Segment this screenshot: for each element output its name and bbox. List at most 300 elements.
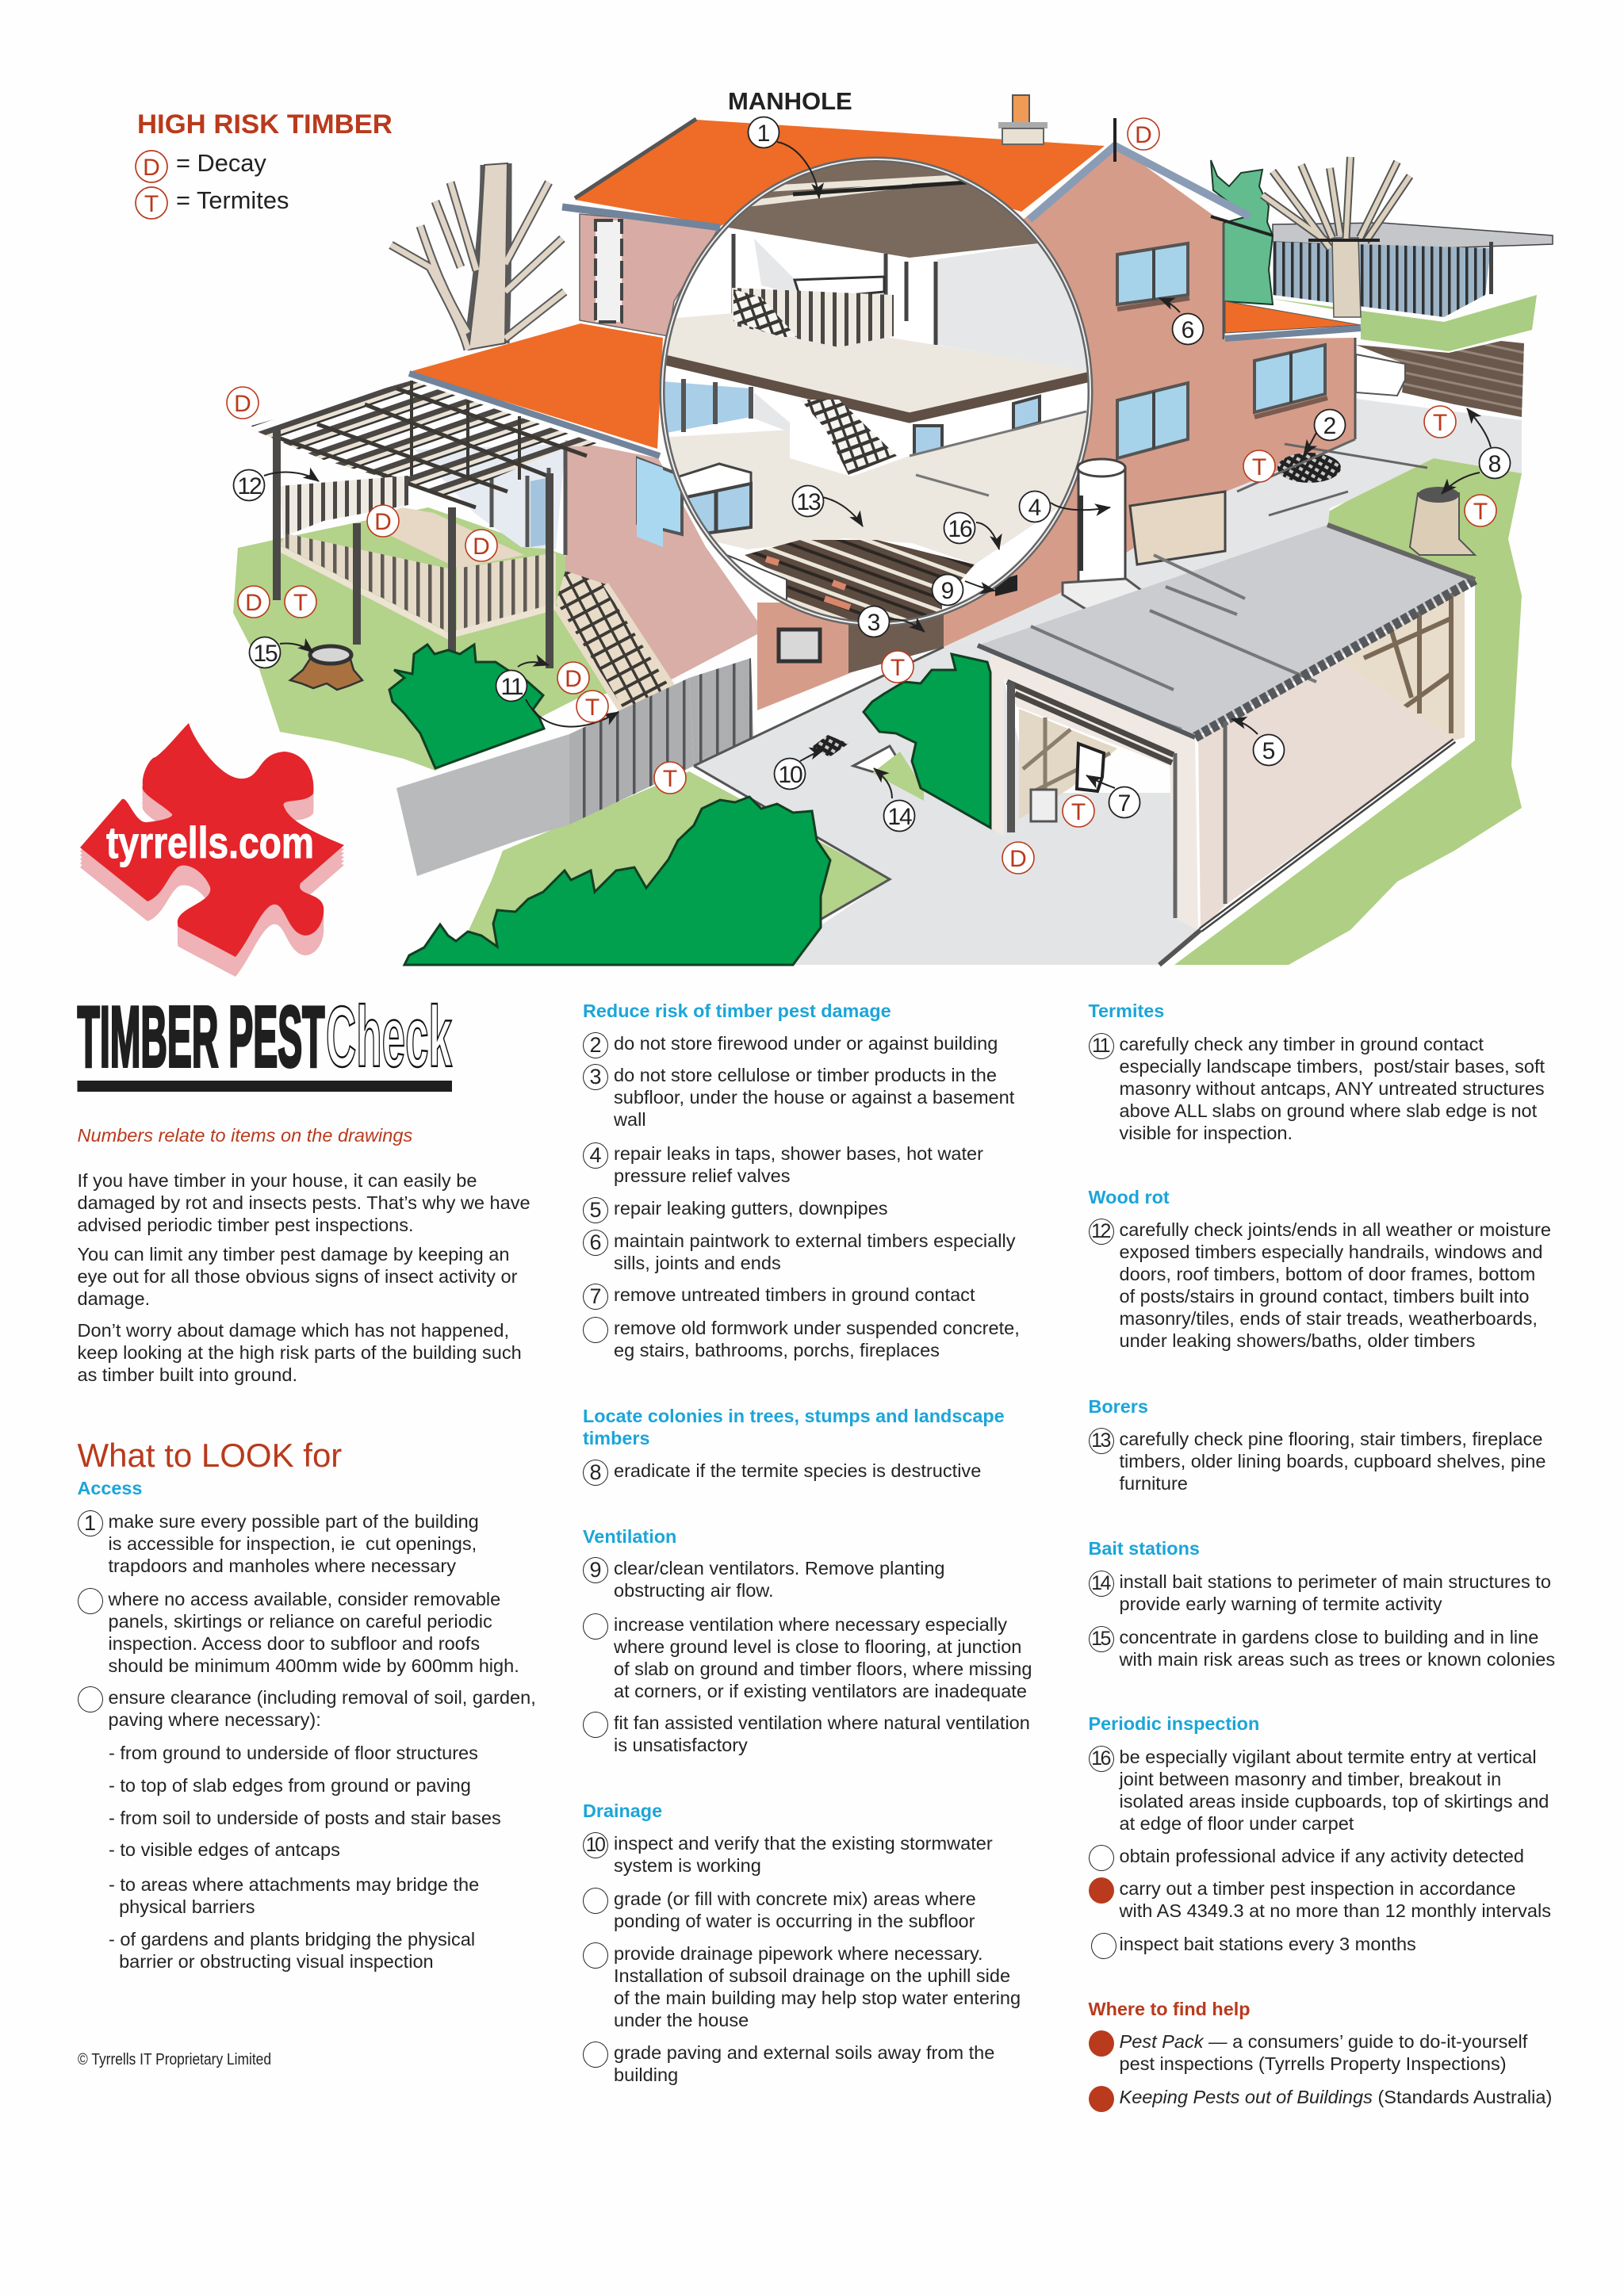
decay and termite markers: D — [565, 666, 582, 692]
intro paragraph 3 — [78, 1319, 522, 1385]
left pale wall lower — [565, 440, 757, 681]
numbered markers: 6 — [1182, 317, 1194, 343]
fence shadow — [396, 701, 691, 876]
joist shadows — [793, 181, 991, 194]
lower floor — [658, 411, 1094, 564]
front shrub — [404, 797, 830, 965]
kitchen unit glass — [687, 484, 751, 536]
right stump top — [1418, 487, 1459, 503]
neighbour roof — [1273, 223, 1553, 248]
beige cabinet — [1130, 492, 1225, 564]
section: wood rot: Wood rot — [1088, 1186, 1170, 1207]
item 11: masonry without antcaps, ANY untreated structures — [1120, 1078, 1545, 1099]
leader arrows — [264, 142, 1491, 798]
item 14 — [1089, 1571, 1551, 1614]
item 12: carefully check joints/ends in all weather or moisture — [1120, 1219, 1551, 1240]
section: termites: Termites — [1088, 1001, 1164, 1021]
section: locate colonies — [583, 1405, 1005, 1448]
item 16: joint between masonry and timber, breakout in — [1120, 1768, 1501, 1789]
legend: high risk timber — [136, 109, 393, 219]
posts — [277, 428, 550, 668]
side wall — [1198, 661, 1454, 930]
roof plane — [409, 323, 663, 449]
circle outline — [662, 159, 1090, 624]
numbered markers — [233, 117, 1510, 831]
item increase ventilation: where ground level is close to flooring, at junction — [614, 1636, 1021, 1657]
right window — [1013, 396, 1040, 430]
item obtain advice: obtain professional advice if any activity detected — [1120, 1846, 1524, 1866]
item 11: visible for inspection. — [1120, 1123, 1293, 1143]
subfloor opening — [848, 603, 944, 673]
gable bracket line — [1211, 216, 1273, 235]
item 10 — [583, 1832, 993, 1876]
item 14: provide early warning of termite activity — [1120, 1594, 1442, 1614]
stair stringers — [556, 584, 675, 711]
item no access: where no access available, consider removable — [108, 1589, 500, 1609]
item carry out inspection: with AS 4349.3 at no more than 12 monthly intervals — [1120, 1900, 1551, 1920]
item 12: of posts/stairs in ground contact, timbers built into — [1120, 1286, 1529, 1307]
item 11 — [1089, 1033, 1545, 1143]
wall vent — [995, 575, 1017, 596]
drain grate — [812, 735, 848, 757]
lawn wedge by box — [872, 752, 924, 801]
left blue window — [638, 458, 682, 534]
far beige open wall — [1340, 582, 1465, 740]
bearer — [280, 549, 556, 636]
item 1 — [78, 1510, 479, 1576]
decay and termite markers: T — [1433, 410, 1447, 436]
note: Numbers relate to items on the drawings — [78, 1124, 412, 1145]
item 1: is accessible for inspection, ie cut openings, — [108, 1533, 477, 1554]
item no access: panels, skirtings or reliance on careful periodic — [108, 1611, 492, 1632]
decay and termite markers: T — [293, 590, 308, 616]
decay and termite markers: D — [374, 509, 392, 535]
sub item: - from ground to underside of floor structures — [109, 1743, 478, 1763]
item 9 — [583, 1557, 945, 1601]
item 3: wall — [614, 1108, 646, 1129]
item pest pack — [1088, 2030, 1527, 2074]
small roof gutter — [1225, 328, 1361, 339]
numbered markers: 16 — [948, 516, 972, 542]
upper lawn — [1268, 295, 1537, 351]
neighbour post — [1489, 242, 1493, 294]
item 7: 7 — [589, 1284, 602, 1308]
item 16: be especially vigilant about termite entry at vertical — [1120, 1746, 1537, 1766]
circle background — [942, 243, 1088, 610]
floor crack line — [916, 475, 989, 496]
logo text: tyrrells.com — [106, 817, 314, 867]
main right wall — [944, 144, 1355, 647]
base rail highlight — [1201, 740, 1454, 930]
left pale wall upper — [580, 214, 720, 336]
magnified cutaway circle — [658, 151, 1094, 634]
gutter — [409, 373, 660, 456]
deck floor — [365, 507, 524, 568]
upper floor — [658, 313, 1094, 415]
item 10: 10 — [586, 1833, 603, 1855]
item carry out inspection — [1088, 1877, 1551, 1922]
base rail — [1201, 740, 1454, 930]
item clearance: ensure clearance (including removal of soil, garden, — [108, 1687, 536, 1708]
item 13: 13 — [1091, 1429, 1109, 1451]
item keeping pests: Keeping Pests out of Buildings (Standards Australia) — [1120, 2087, 1552, 2107]
roof — [978, 525, 1475, 737]
front edge — [978, 645, 1195, 737]
left stump — [290, 654, 362, 690]
item 6 — [583, 1230, 1015, 1273]
section: reduce risk: Reduce risk of timber pest damage — [583, 1001, 891, 1021]
upper stair flight — [733, 289, 797, 337]
neighbouring house — [1268, 223, 1553, 417]
window upper — [1117, 243, 1189, 309]
item bait inspection: inspect bait stations every 3 months — [1120, 1933, 1416, 1954]
legend termites — [136, 186, 289, 219]
item formwork: eg stairs, bathrooms, porchs, fireplaces — [614, 1340, 940, 1360]
item 7: remove untreated timbers in ground contact — [614, 1284, 975, 1305]
right fascia — [1195, 580, 1475, 737]
intro paragraph 2: You can limit any timber pest damage by keeping an — [78, 1243, 509, 1264]
item clearance: paving where necessary): — [108, 1709, 321, 1730]
lower brick pier — [757, 603, 850, 710]
circle inner highlight — [662, 159, 1090, 624]
glazing frames — [492, 444, 565, 555]
item fan — [583, 1712, 1030, 1755]
right path — [1226, 399, 1522, 508]
window lower — [1117, 383, 1188, 458]
upper grey wall — [937, 243, 1094, 373]
intro paragraph 1: advised periodic timber pest inspections. — [78, 1215, 414, 1235]
fence — [569, 658, 753, 825]
right lawn — [1174, 458, 1522, 965]
centre window — [914, 426, 942, 456]
section: access: Access — [78, 1478, 142, 1498]
legend decay: D — [143, 155, 160, 181]
decay and termite markers: T — [663, 766, 677, 792]
stairs — [556, 571, 675, 711]
intro paragraph 1 — [78, 1170, 530, 1235]
item 13 — [1089, 1428, 1545, 1494]
item 13: carefully check pine flooring, stair timbers, fireplace — [1120, 1429, 1542, 1449]
house walls — [565, 144, 1355, 710]
numbered markers: 1 — [757, 121, 770, 147]
numbered markers: 15 — [253, 641, 278, 667]
item 1: 1 — [84, 1511, 96, 1535]
ledge grey window — [730, 576, 753, 613]
upper grey panel — [754, 239, 796, 290]
numbered markers: 11 — [500, 674, 523, 700]
lower stairs — [800, 400, 897, 475]
wall ladder strip — [596, 220, 622, 322]
item 12 — [1089, 1219, 1551, 1351]
numbered markers: 3 — [868, 610, 880, 636]
pergola rafters — [274, 388, 587, 507]
item pipework: provide drainage pipework where necessary. — [614, 1942, 983, 1963]
chimney — [998, 95, 1048, 144]
sub item: physical barriers — [119, 1896, 255, 1917]
door stripes — [1007, 682, 1174, 763]
item no access: inspection. Access door to subfloor and roofs — [108, 1633, 480, 1654]
item clearance — [78, 1686, 536, 1730]
decay and termite markers: D — [234, 391, 251, 417]
item pipework: Installation of subsoil drainage on the uphill side — [614, 1965, 1010, 1985]
right stump — [1410, 493, 1475, 555]
item grade fill — [583, 1888, 976, 1931]
numbered markers: 7 — [1118, 790, 1131, 817]
heading: what to look for: What to LOOK for — [78, 1437, 342, 1473]
decay and termite markers: D — [245, 590, 262, 616]
firewood stack — [1277, 453, 1341, 483]
timber retaining wall — [1356, 341, 1524, 417]
item 3: subfloor, under the house or against a basement — [614, 1086, 1014, 1107]
gable spike — [1113, 118, 1116, 162]
intro paragraph 1: If you have timber in your house, it can easily be — [78, 1170, 477, 1191]
item grade fill: grade (or fill with concrete mix) areas where — [614, 1888, 976, 1909]
puzzle face — [80, 723, 344, 957]
item 15: 15 — [1091, 1627, 1109, 1649]
decay and termite markers: T — [1252, 454, 1266, 480]
water tank — [1356, 354, 1405, 396]
intro paragraph 2: damage. — [78, 1288, 150, 1308]
puzzle extrusion — [80, 727, 344, 977]
item 5: repair leaking gutters, downpipes — [614, 1197, 888, 1218]
driveway shrub — [864, 654, 990, 828]
item 6: 6 — [589, 1230, 602, 1254]
pergola beams — [251, 381, 606, 497]
item 2: do not store firewood under or against building — [614, 1032, 998, 1053]
item grade paving — [583, 2042, 994, 2085]
deck — [277, 428, 675, 711]
decay and termite markers: T — [1473, 499, 1488, 525]
path edge lines — [1237, 439, 1427, 515]
left lawn — [233, 507, 634, 771]
white ledge — [727, 554, 787, 600]
intro paragraph 2 — [78, 1243, 517, 1309]
item 15: concentrate in gardens close to building and in line — [1120, 1627, 1538, 1647]
stud lines — [1023, 718, 1110, 805]
gable trim — [1029, 146, 1250, 220]
heater top — [1078, 459, 1125, 476]
fence panel front — [569, 678, 694, 825]
item 3 — [583, 1064, 1015, 1129]
glazing blue — [530, 478, 546, 547]
kitchen bench — [793, 276, 885, 294]
drive edge — [1159, 930, 1201, 965]
teal hedge — [1211, 160, 1273, 304]
bricks — [766, 559, 850, 607]
title: Timber Pest Check — [77, 999, 454, 1092]
item 12: exposed timbers especially handrails, windows and — [1120, 1242, 1543, 1262]
numbered markers: 14 — [887, 804, 912, 830]
sub item: - to top of slab edges from ground or paving — [109, 1774, 471, 1795]
numbered markers: 2 — [1323, 413, 1336, 439]
item carry out inspection: carry out a timber pest inspection in accordance — [1120, 1877, 1515, 1898]
item 12: 12 — [1091, 1219, 1109, 1242]
sub item: - to visible edges of antcaps — [109, 1839, 340, 1860]
deck shrub — [389, 645, 544, 768]
intro paragraph 2: eye out for all those obvious signs of insect activity or — [78, 1265, 517, 1286]
neighbour balustrade — [1273, 242, 1491, 317]
house cutaway illustration with markers and logo — [80, 87, 1553, 977]
item grade paving: grade paving and external soils away from the — [614, 2042, 994, 2063]
numbered markers: 8 — [1488, 451, 1501, 477]
numbered markers: 13 — [796, 489, 821, 515]
decay and termite markers: D — [1135, 122, 1152, 148]
intro paragraph 3: Don’t worry about damage which has not happened, — [78, 1319, 509, 1340]
item 15: with main risk areas such as trees or known colonies — [1120, 1649, 1555, 1670]
tall blue panel — [637, 458, 663, 547]
yard fixtures — [694, 647, 944, 936]
upper roof — [562, 95, 1361, 339]
window right — [1254, 345, 1327, 417]
sub item: - to areas where attachments may bridge the — [109, 1874, 479, 1895]
lower room grey wall — [754, 392, 790, 432]
garage — [978, 525, 1475, 965]
ceiling joists — [752, 175, 960, 206]
small basement window — [779, 629, 820, 661]
item 8: 8 — [589, 1460, 602, 1484]
section: drainage: Drainage — [583, 1800, 662, 1820]
item 11: 11 — [1092, 1034, 1109, 1056]
numbered markers: 5 — [1262, 738, 1275, 764]
legend decay — [136, 149, 266, 182]
item pest pack: pest inspections (Tyrrells Property Inspections) — [1120, 2053, 1507, 2074]
decay and termite markers — [227, 118, 1496, 874]
item increase ventilation: at corners, or if existing ventilators are inadequate — [614, 1681, 1027, 1701]
front fascia — [990, 652, 1198, 930]
fence panel side — [689, 658, 753, 766]
small lower roof — [1225, 301, 1361, 333]
door post — [1007, 682, 1015, 832]
ground: lawns, driveway, paths — [233, 399, 1522, 965]
front lawn — [404, 771, 890, 965]
section: bait stations: Bait stations — [1088, 1538, 1200, 1559]
item pipework — [583, 1942, 1021, 2030]
item 8: eradicate if the termite species is destructive — [614, 1460, 981, 1481]
left balustrade — [280, 534, 448, 632]
left stump top — [310, 646, 351, 664]
concrete strip beside wall — [944, 486, 1330, 647]
item 6: sills, joints and ends — [614, 1253, 781, 1273]
numbered markers: 4 — [1028, 495, 1041, 521]
item 2: 2 — [589, 1032, 602, 1056]
title bar — [78, 1081, 452, 1092]
legend termites: = Termites — [176, 186, 289, 214]
item 3: do not store cellulose or timber products in the — [614, 1064, 997, 1085]
drum — [1031, 790, 1056, 821]
glazing behind pergola — [415, 444, 565, 549]
item 4 — [583, 1142, 983, 1186]
numbered markers: 10 — [778, 762, 802, 788]
wall edge lines — [1224, 223, 1355, 439]
item 9: clear/clean ventilators. Remove planting — [614, 1557, 945, 1578]
kitchen unit top — [672, 464, 751, 497]
item formwork: remove old formwork under suspended concrete, — [614, 1318, 1020, 1338]
numbered markers: 12 — [237, 473, 262, 499]
manhole label: MANHOLE — [728, 87, 852, 115]
driveway — [694, 626, 1198, 965]
intro paragraph 1: damaged by rot and insects pests. That’s why we have — [78, 1192, 530, 1213]
item grade fill: ponding of water is occurring in the subfloor — [614, 1911, 975, 1931]
far wall studs — [1364, 591, 1451, 733]
floor edge beam — [658, 358, 1094, 418]
lower room windows — [662, 381, 751, 434]
item 10: inspect and verify that the existing stormwater — [614, 1833, 993, 1854]
roof sheeting lines — [1031, 555, 1316, 729]
right tree — [1262, 157, 1410, 317]
item 9: 9 — [589, 1557, 602, 1581]
section: periodic inspection: Periodic inspection — [1088, 1712, 1259, 1733]
item pest pack: Pest Pack — a consumers’ guide to do-it-yourself — [1120, 2031, 1527, 2052]
white timber — [1077, 744, 1104, 791]
decay and termite markers: D — [473, 534, 490, 560]
item 16 — [1088, 1746, 1549, 1835]
section: locate colonies: Locate colonies in trees, stumps and landscape — [583, 1405, 1005, 1425]
legend decay: = Decay — [176, 149, 266, 177]
roof underside — [728, 162, 1037, 258]
item fan: fit fan assisted ventilation where natural ventilation — [614, 1712, 1030, 1733]
decay and termite markers: T — [891, 655, 905, 681]
section: borers: Borers — [1088, 1395, 1148, 1416]
item 4: 4 — [589, 1143, 602, 1167]
item 14: install bait stations to perimeter of main structures to — [1120, 1571, 1551, 1592]
item pipework: under the house — [614, 2009, 749, 2030]
item 11: above ALL slabs on ground where slab edge is not — [1120, 1100, 1537, 1121]
subfloor framing — [745, 540, 975, 621]
section: locate colonies: timbers — [583, 1427, 650, 1448]
item grade paving: building — [614, 2064, 678, 2085]
item 12: doors, roof timbers, bottom of door frames, bottom — [1120, 1264, 1535, 1284]
upper columns — [733, 234, 936, 345]
legend termites: T — [144, 191, 159, 217]
lower roof — [251, 323, 663, 555]
heater pipe — [1078, 496, 1083, 571]
sub item: barrier or obstructing visual inspection — [119, 1950, 434, 1971]
item increase ventilation: of slab on ground and timber floors, where missing — [614, 1659, 1032, 1679]
item 4: repair leaks in taps, shower bases, hot water — [614, 1143, 983, 1164]
kitchen mullion — [714, 492, 718, 533]
floor edge line — [910, 411, 1086, 456]
item 12: masonry/tiles, ends of stair treads, weatherboards, — [1120, 1308, 1538, 1329]
exterior windows — [637, 243, 1327, 661]
item pipework: of the main building may help stop water entering — [614, 1987, 1021, 2007]
upper stair rail — [732, 288, 894, 347]
item 5: 5 — [589, 1197, 602, 1221]
item 16: at edge of floor under carpet — [1120, 1812, 1354, 1833]
item 4: pressure relief valves — [614, 1165, 790, 1186]
item 16: isolated areas inside cupboards, top of skirtings and — [1120, 1790, 1549, 1811]
right door post — [1175, 721, 1225, 918]
numbered markers: 9 — [941, 578, 954, 604]
far balustrade — [280, 476, 408, 537]
right balustrade — [457, 553, 556, 632]
item fan: is unsatisfactory — [614, 1735, 748, 1755]
lawn edge lines — [694, 647, 944, 936]
item 15 — [1088, 1625, 1555, 1670]
item 11: carefully check any timber in ground contact — [1120, 1034, 1484, 1054]
intro paragraph 3: as timber built into ground. — [78, 1364, 297, 1384]
decay and termite markers: T — [585, 695, 599, 721]
item 1: trapdoors and manholes where necessary — [108, 1556, 456, 1576]
item formwork — [583, 1317, 1020, 1360]
item increase ventilation — [583, 1613, 1032, 1701]
sub item: - from soil to underside of posts and stair bases — [109, 1808, 501, 1828]
fascia left — [575, 119, 696, 198]
item 9: obstructing air flow. — [614, 1579, 774, 1600]
item 3: 3 — [589, 1064, 602, 1088]
water heater — [1078, 468, 1125, 583]
sub item: - of gardens and plants bridging the physical — [109, 1928, 475, 1949]
left tree — [391, 163, 565, 350]
